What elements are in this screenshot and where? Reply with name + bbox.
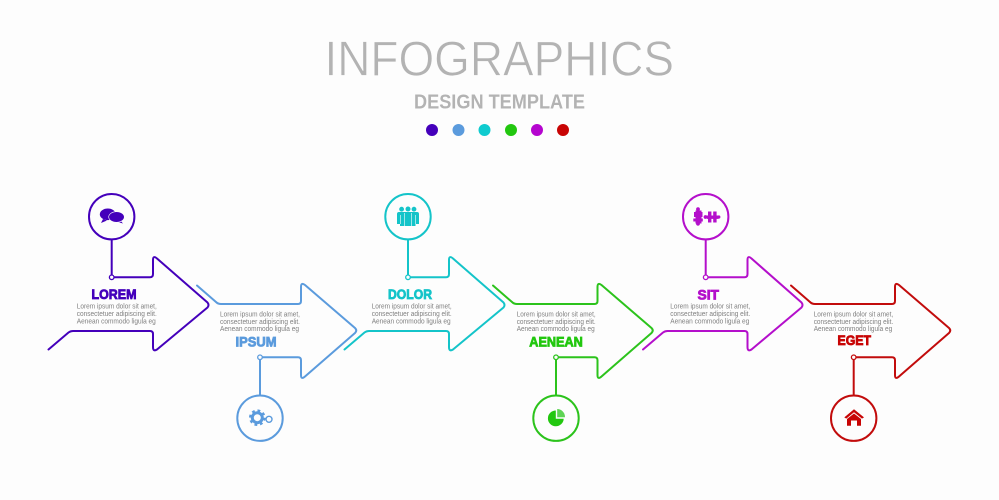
arrow outline	[197, 284, 356, 378]
icon: people	[385, 194, 431, 239]
heading: AENEAN	[529, 334, 583, 350]
icon: gears	[237, 396, 283, 441]
body text: Lorem ipsum dolor sit amet,	[517, 312, 596, 318]
body text: consectetuer adipiscing elit.	[670, 311, 750, 318]
arrow outline	[791, 284, 950, 378]
body text: consectetuer adipiscing elit.	[77, 311, 157, 318]
arrow outline	[493, 284, 653, 378]
panel: dolor step	[344, 194, 504, 350]
connector	[258, 355, 262, 396]
body text	[220, 312, 300, 333]
body text	[670, 304, 750, 325]
body text: Lorem ipsum dolor sit amet,	[670, 304, 750, 310]
body text	[372, 304, 452, 325]
arrow outline	[344, 257, 504, 350]
body text: consectetuer adipiscing elit.	[814, 319, 893, 326]
heading: LOREM	[92, 287, 136, 302]
body text: Lorem ipsum dolor sit amet,	[77, 304, 157, 310]
heading: DOLOR	[388, 287, 432, 302]
panel: lorem step	[48, 194, 208, 350]
body text: consectetuer adipiscing elit.	[372, 311, 452, 318]
panel: eget step	[791, 284, 950, 441]
panel: aenean step	[493, 284, 653, 441]
connector	[851, 355, 856, 396]
body text: Aenean commodo ligula eg	[814, 326, 892, 333]
heading: SIT	[698, 288, 720, 302]
panel: sit step	[643, 194, 802, 350]
arrow outline	[48, 257, 208, 350]
body text: Aenean commodo ligula eg	[670, 318, 749, 325]
icon: pie chart	[533, 396, 579, 441]
heading: IPSUM	[236, 334, 276, 350]
title: INFOGRAPHICS	[324, 32, 674, 86]
arrow outline	[643, 257, 802, 350]
body text: consectetuer adipiscing elit.	[220, 319, 300, 326]
body text	[814, 312, 893, 333]
body text: Aenean commodo ligula eg	[77, 318, 156, 325]
body text: Aenean commodo ligula eg	[220, 326, 299, 333]
colour dots	[426, 124, 569, 136]
body text: Lorem ipsum dolor sit amet,	[220, 312, 300, 318]
panel: ipsum step	[197, 284, 356, 441]
icon: puzzle pieces	[683, 194, 728, 239]
body text: Lorem ipsum dolor sit amet,	[372, 304, 452, 310]
body text: Aenean commodo ligula eg	[372, 318, 451, 325]
heading: EGET	[838, 333, 872, 348]
body text	[77, 304, 157, 325]
connector	[406, 239, 410, 280]
body text: Aenean commodo ligula eg	[517, 326, 595, 333]
connector	[109, 239, 114, 280]
body text: Lorem ipsum dolor sit amet,	[814, 312, 893, 318]
connector	[703, 239, 708, 280]
body text: consectetuer adipiscing elit.	[517, 319, 596, 326]
icon: chat bubbles	[89, 194, 134, 239]
body text	[517, 312, 596, 333]
connector	[554, 355, 558, 396]
icon: house	[831, 396, 876, 441]
subtitle: DESIGN TEMPLATE	[414, 92, 585, 114]
